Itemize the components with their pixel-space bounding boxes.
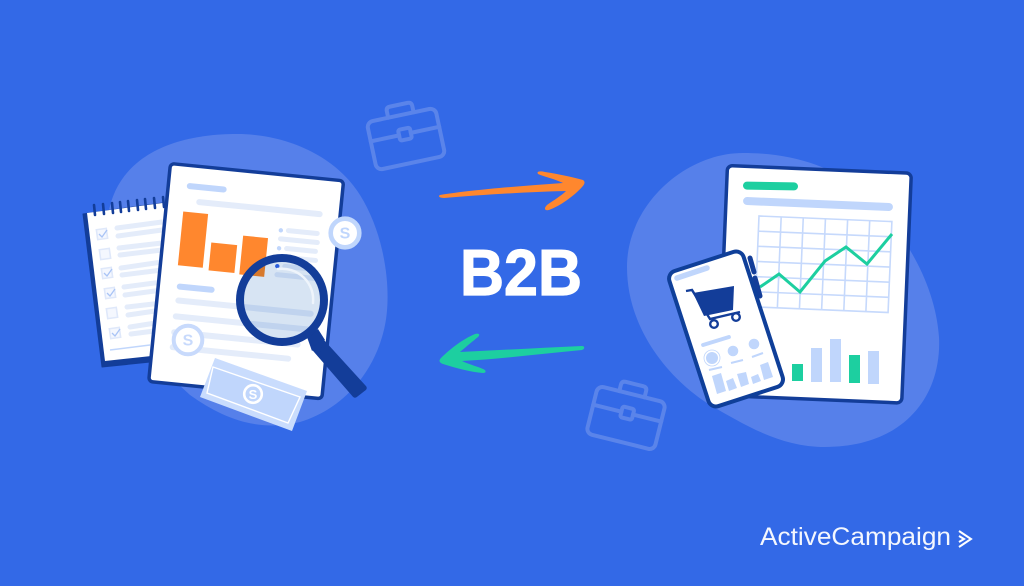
background blob right (627, 153, 939, 447)
heading: B2B: B2B (460, 236, 582, 309)
dollar bill (200, 358, 307, 431)
icon: briefcase top (364, 97, 445, 170)
legend list (274, 227, 321, 281)
coin left (174, 326, 202, 354)
panel: research illustration (83, 134, 388, 431)
dollar bill: S (249, 387, 258, 402)
coin right: S (340, 226, 351, 242)
background blob left (108, 134, 388, 426)
magnifying glass (240, 258, 364, 395)
analytics document (718, 166, 911, 403)
icon: shopping cart (686, 286, 740, 328)
document heading bars (185, 183, 324, 217)
logo: ActiveCampaign: ActiveCampaign (760, 523, 951, 551)
phone (667, 249, 785, 409)
bar chart (792, 339, 879, 384)
arrow: green left (440, 334, 584, 373)
notepad with checklist (83, 197, 170, 367)
orange bar chart (178, 212, 270, 277)
green title pill (743, 182, 798, 190)
arrow: orange right (439, 171, 585, 210)
icon: briefcase bottom (586, 376, 668, 450)
phone stats (703, 337, 773, 394)
coin left: S (183, 332, 194, 350)
panel: analytics illustration (627, 153, 939, 447)
coin right (331, 219, 359, 247)
line chart (755, 216, 892, 312)
report document (149, 164, 344, 399)
subtitle bar (743, 197, 893, 211)
document text lines (169, 283, 315, 364)
